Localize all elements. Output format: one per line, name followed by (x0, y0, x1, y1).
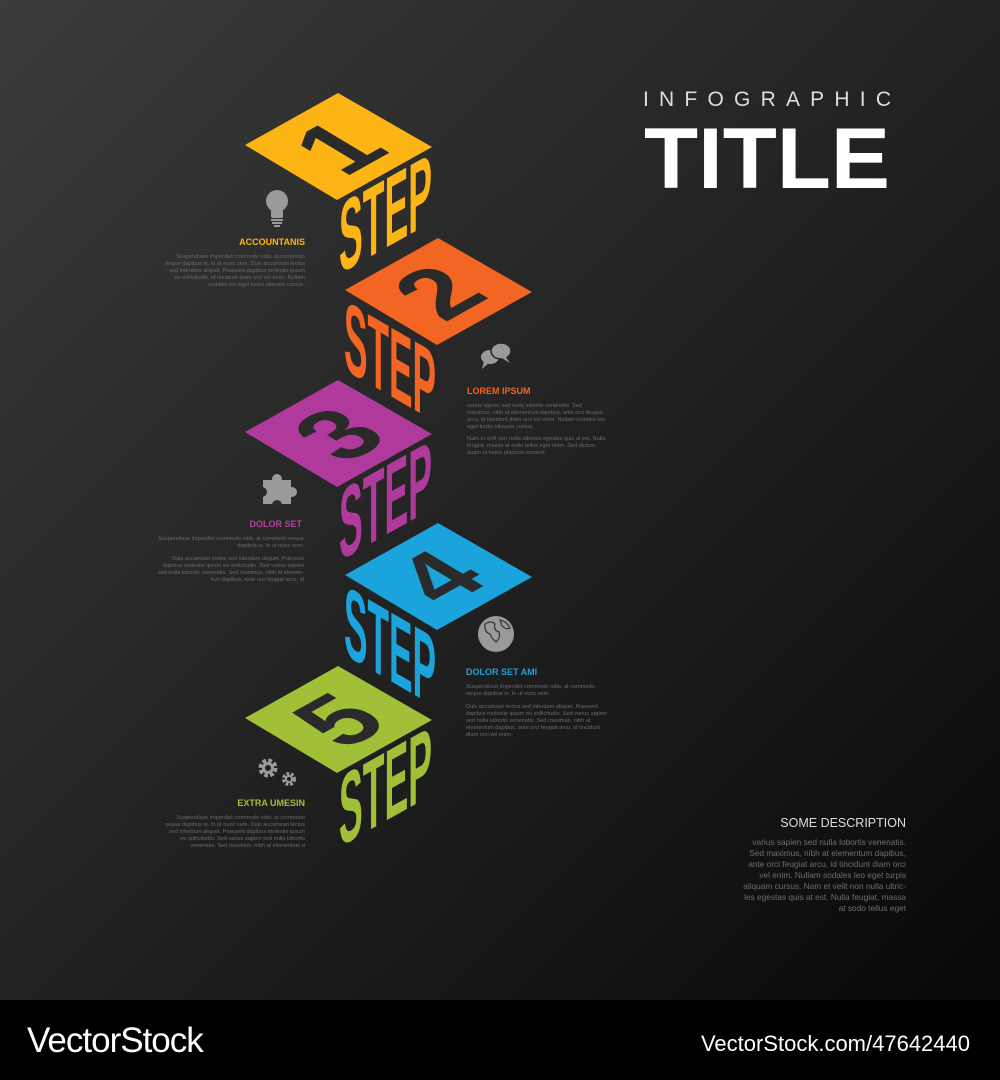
description: vel enim. Nullam sodales leo eget turpis (759, 870, 906, 880)
description: ante orci feugiat arcu, id tincidunt diam orci (748, 859, 906, 869)
footer band: VectorStock.com/47642440 (701, 1031, 970, 1056)
text: step 1: sodales leo eget turpis aliquam cursus. (208, 282, 305, 288)
text: step 1: Suspendisse imperdiet commodo odio, at commodo (176, 254, 305, 260)
text: step 2: maximus, nibh at elementum dapibus, ante orci feugiat (467, 410, 603, 416)
description: SOME DESCRIPTION (780, 816, 906, 830)
text: step 5: neque dapibus in. In ut nunc sem. Duis accumsan lectus (165, 822, 305, 828)
text: step 1: ACCOUNTANIS (239, 237, 305, 247)
step 5 block (245, 666, 432, 868)
step 5 block: 5 (267, 679, 410, 762)
text: STEP (339, 705, 432, 868)
text: step 3: DOLOR SET (249, 519, 302, 529)
text: step 3: Duis accumsan lectus sed interdum aliquet. Praesent (172, 556, 304, 562)
step 4 block: STEP (344, 563, 436, 729)
text: step 3: dapibus molestie ipsum eu sollicitudin. Sed varius sapien (163, 563, 304, 569)
title: TITLE (644, 111, 890, 207)
text: STEP (339, 132, 432, 295)
text: step 1: neque dapibus in. In ut nunc sem. Duis accumsan lectus (165, 261, 305, 267)
text: step 5: Suspendisse imperdiet commodo odio, at commodo (176, 815, 305, 821)
description (743, 816, 907, 913)
text: step 5: venenatis. Sed maximus, nibh at elementum d (190, 843, 305, 849)
icon: puzzle (257, 474, 297, 510)
icon: globe (478, 616, 514, 652)
text: step 5: eu sollicitudin. Sed varius sapien sed nulla lobortis (180, 836, 305, 842)
text: step 2: eget turpis aliquam cursus. (467, 424, 534, 430)
text: step 4: Suspendisse imperdiet commodo odio, at commodo (466, 684, 595, 690)
text: step 4: diam orci vel enim. (466, 732, 513, 738)
text: step 3: sed nulla lobortis venenatis. Sed maximus, nibh at elemen- (158, 570, 304, 576)
description: at sodo tellus eget (839, 903, 907, 913)
text: step 2: arcu, id tincidunt diam orci vel enim. Nullam sodales leo (467, 417, 605, 423)
step 1 block: 1 (267, 106, 410, 189)
icon: gears (261, 761, 294, 784)
text: step 5 (165, 798, 305, 849)
description: aliquam cursus. Nam et velit non nulla ultric- (743, 881, 906, 891)
text: step 1: eu sollicitudin, id tincidunt diam orci vel enim. Nullam (174, 275, 305, 281)
text: step 4 (466, 667, 607, 738)
text: step 4: elementum dapibus, ante orci feugiat arcu, id tincidunt (466, 725, 600, 731)
footer band: VectorStock (27, 1021, 204, 1060)
text: step 4: DOLOR SET AMI (466, 667, 537, 677)
text: step 2: varius sapien sed nulla lobortis venenatis. Sed (467, 403, 582, 409)
text: step 1 (165, 237, 305, 288)
step 2 block: STEP (344, 278, 436, 444)
text: step 3: tum dapibus, ante orci feugiat arcu, id (211, 577, 304, 583)
step 3 block (245, 380, 432, 582)
text: step 3: Suspendisse imperdiet commodo odio, at commodo neque (158, 536, 304, 542)
step 2 block: 2 (367, 251, 510, 334)
text: step 3: dapibus in. In ut nunc sem. (237, 543, 304, 549)
step 2 block (344, 238, 532, 444)
text: step 1: sed interdum aliquet. Praesent dapibus molestie ipsum (169, 268, 305, 274)
text: step 2: feugiat, massa at sodo tellus eget enim. Sed dictum (467, 443, 595, 449)
text: step 2: quam ut turpis placerat consect (467, 450, 545, 456)
text: step 4: neque dapibus in. In ut nunc sem. (466, 691, 550, 697)
text: step 5: EXTRA UMESIN (237, 798, 305, 808)
description: varius sapien sed nulla lobortis venenatis. (752, 837, 906, 847)
footer band (0, 1000, 1000, 1080)
text: step 4: sed nulla lobortis venenatis. Sed maximus, nibh at (466, 718, 591, 724)
text: STEP (339, 419, 432, 582)
step 3 block: 3 (267, 393, 410, 476)
step 4 block (344, 523, 532, 729)
icon: bulb (266, 190, 288, 227)
step 4 block: 4 (367, 535, 510, 619)
text: step 5: sed interdum aliquet. Praesent dapibus molestie ipsum (169, 829, 305, 835)
text: step 2: Nam et velit non nulla ultricies egestas quis at est. Nulla (467, 436, 606, 442)
description: les egestas quis at est. Nulla feugiat, massa (744, 892, 906, 902)
description: Sed maximus, nibh at elementum dapibus, (749, 848, 906, 858)
icon: chat bubbles (481, 343, 511, 369)
text: step 2 (467, 386, 606, 456)
text: step 2: LOREM IPSUM (467, 386, 531, 396)
step 1 block (245, 93, 432, 295)
title: INFOGRAPHIC (643, 88, 891, 111)
text: step 4: dapibus molestie ipsum eu sollicitudin. Sed varius sapien (466, 711, 607, 717)
text: step 4: Duis accumsan lectus sed interdum aliquet. Praesent (466, 704, 598, 710)
text: step 3 (158, 519, 304, 583)
